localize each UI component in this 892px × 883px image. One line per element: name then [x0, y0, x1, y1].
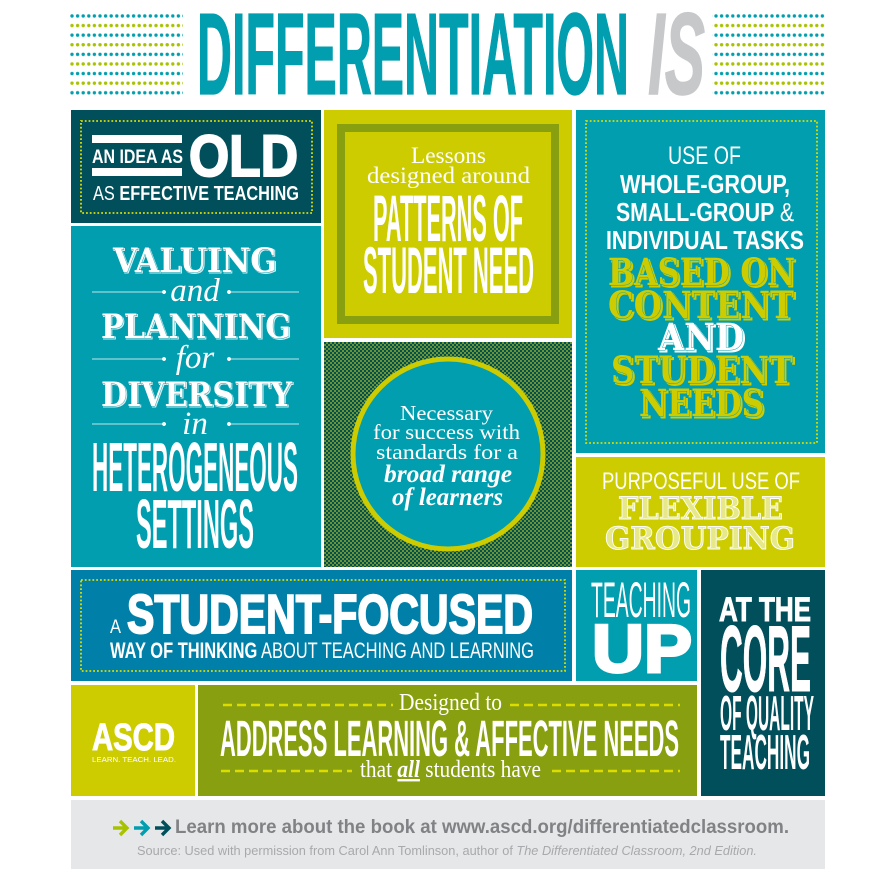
title [70, 0, 825, 119]
panel: student-focused: A [110, 617, 121, 638]
panel: student-focused: WAY OF THINKING ABOUT TEACHING AND LEARNING [110, 638, 534, 663]
panel: student-focused: STUDENT-FOCUSED [127, 583, 533, 645]
panel: at the core of quality teaching [701, 570, 825, 796]
left dot pattern [70, 14, 183, 97]
panel: purposeful use of flexible grouping: PURPOSEFUL USE OF [602, 468, 800, 495]
text: TEACHING [591, 572, 691, 628]
panel: patterns of student need: Lessons [411, 143, 486, 168]
panel: teaching up [576, 570, 697, 687]
panel: necessary for success: for success with [373, 420, 521, 444]
circle badge [353, 359, 543, 549]
panel: patterns of student need: designed around [367, 163, 531, 188]
panel: valuing and planning for diversity: SETTINGS [136, 485, 254, 563]
panel: necessary for success [324, 342, 572, 567]
right dot pattern [712, 14, 825, 97]
panel: teaching up: UP [592, 611, 692, 687]
panel: valuing and planning for diversity: and [170, 273, 220, 309]
panel: valuing and planning for diversity: DIVERSITY [101, 375, 293, 415]
panel: use of whole-group, small-group and individual tasks: NEEDS [639, 381, 764, 425]
panel: footer: Learn more about the book at www.ascd.org/differentiatedclassroom. [175, 817, 789, 838]
panel: purposeful use of flexible grouping: FLEXIBLE [618, 491, 783, 527]
panel: footer: Source: Used with permission from Carol Ann Tomlinson, author of The Differentiated Classroom, 2nd Edition. [137, 844, 757, 858]
panel: valuing and planning for diversity [71, 226, 321, 567]
panel: valuing and planning for diversity: VALUING [112, 241, 277, 281]
panel: valuing and planning for diversity: for [176, 340, 214, 376]
text: PATTERNS OF [373, 181, 523, 255]
panel: designed to address needs: Designed to [399, 690, 502, 716]
panel: necessary for success: of learners [392, 484, 503, 511]
panel: use of whole-group, small-group and individual tasks: SMALL-GROUP & [616, 197, 794, 227]
panel: student-focused [71, 570, 572, 681]
panel: necessary for success: broad range [384, 461, 512, 488]
panel: ascd logo: LEARN. TEACH. LEAD. [92, 757, 176, 764]
panel: footer [71, 800, 825, 869]
panel: ascd logo [71, 685, 195, 796]
panel: use of whole-group, small-group and individual tasks: AND [657, 315, 744, 359]
panel: use of whole-group, small-group and individual tasks: WHOLE-GROUP, [620, 169, 790, 199]
panel: valuing and planning for diversity: PLANNING [101, 307, 291, 347]
panel: use of whole-group, small-group and individual tasks: STUDENT [611, 348, 793, 392]
panel: valuing and planning for diversity: in [182, 406, 208, 442]
panel: ascd logo: ASCD [92, 717, 175, 759]
text: STUDENT NEED [363, 233, 534, 307]
panel: at the core of quality teaching: AT THE [719, 591, 811, 629]
panel: use of whole-group, small-group and individual tasks [576, 110, 825, 453]
panel: purposeful use of flexible grouping: GROUPING [605, 521, 795, 557]
panel: use of whole-group, small-group and individual tasks: BASED ON [608, 250, 795, 294]
panel: patterns of student need [324, 110, 572, 338]
panel: designed to address needs [198, 685, 697, 796]
panel: designed to address needs: that all students have [360, 757, 541, 783]
text: HETEROGENEOUS [92, 428, 298, 506]
panel: use of whole-group, small-group and individual tasks: INDIVIDUAL TASKS [606, 225, 804, 255]
icon: arrows [113, 821, 169, 835]
panel: an idea as old: AN IDEA AS [92, 147, 183, 168]
panel: purposeful use of flexible grouping [576, 457, 825, 567]
panel: necessary for success: Necessary [400, 401, 494, 425]
panel: use of whole-group, small-group and individual tasks: USE OF [668, 142, 741, 170]
panel: an idea as old [71, 110, 321, 223]
panel: an idea as old: AS EFFECTIVE TEACHING [93, 183, 299, 205]
panel: necessary for success: standards for a [376, 440, 519, 464]
panel: use of whole-group, small-group and individual tasks: CONTENT [608, 283, 794, 327]
panel: an idea as old: OLD [189, 124, 298, 189]
